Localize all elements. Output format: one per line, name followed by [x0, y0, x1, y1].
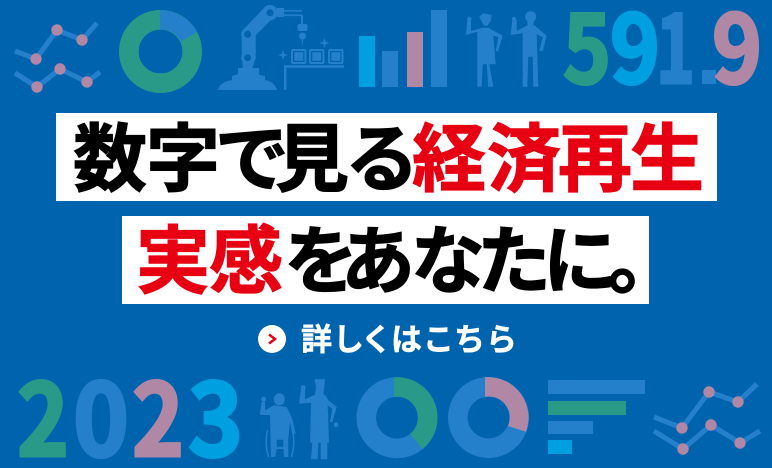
call to action link: 詳しくはこちら	[301, 322, 517, 358]
title line 1 box: 数字で見る経済再生	[73, 118, 704, 201]
big number 591.9	[563, 0, 762, 111]
line chart: top left	[15, 23, 100, 93]
icon: wheelchair user and standing person	[260, 379, 338, 459]
donut chart: bottom green and blue	[366, 377, 438, 449]
title line 2 box: 実感をあなたに。	[136, 220, 682, 303]
bar chart: top	[359, 10, 447, 87]
horizontal bar chart	[548, 380, 645, 454]
big number 2023	[17, 340, 243, 468]
line chart: bottom right	[654, 384, 760, 455]
icon: two standing people	[466, 11, 547, 87]
icon: robot arm with conveyor	[218, 5, 344, 90]
donut chart: bottom pink and blue	[458, 377, 529, 448]
donut chart: top green and blue	[129, 10, 197, 83]
